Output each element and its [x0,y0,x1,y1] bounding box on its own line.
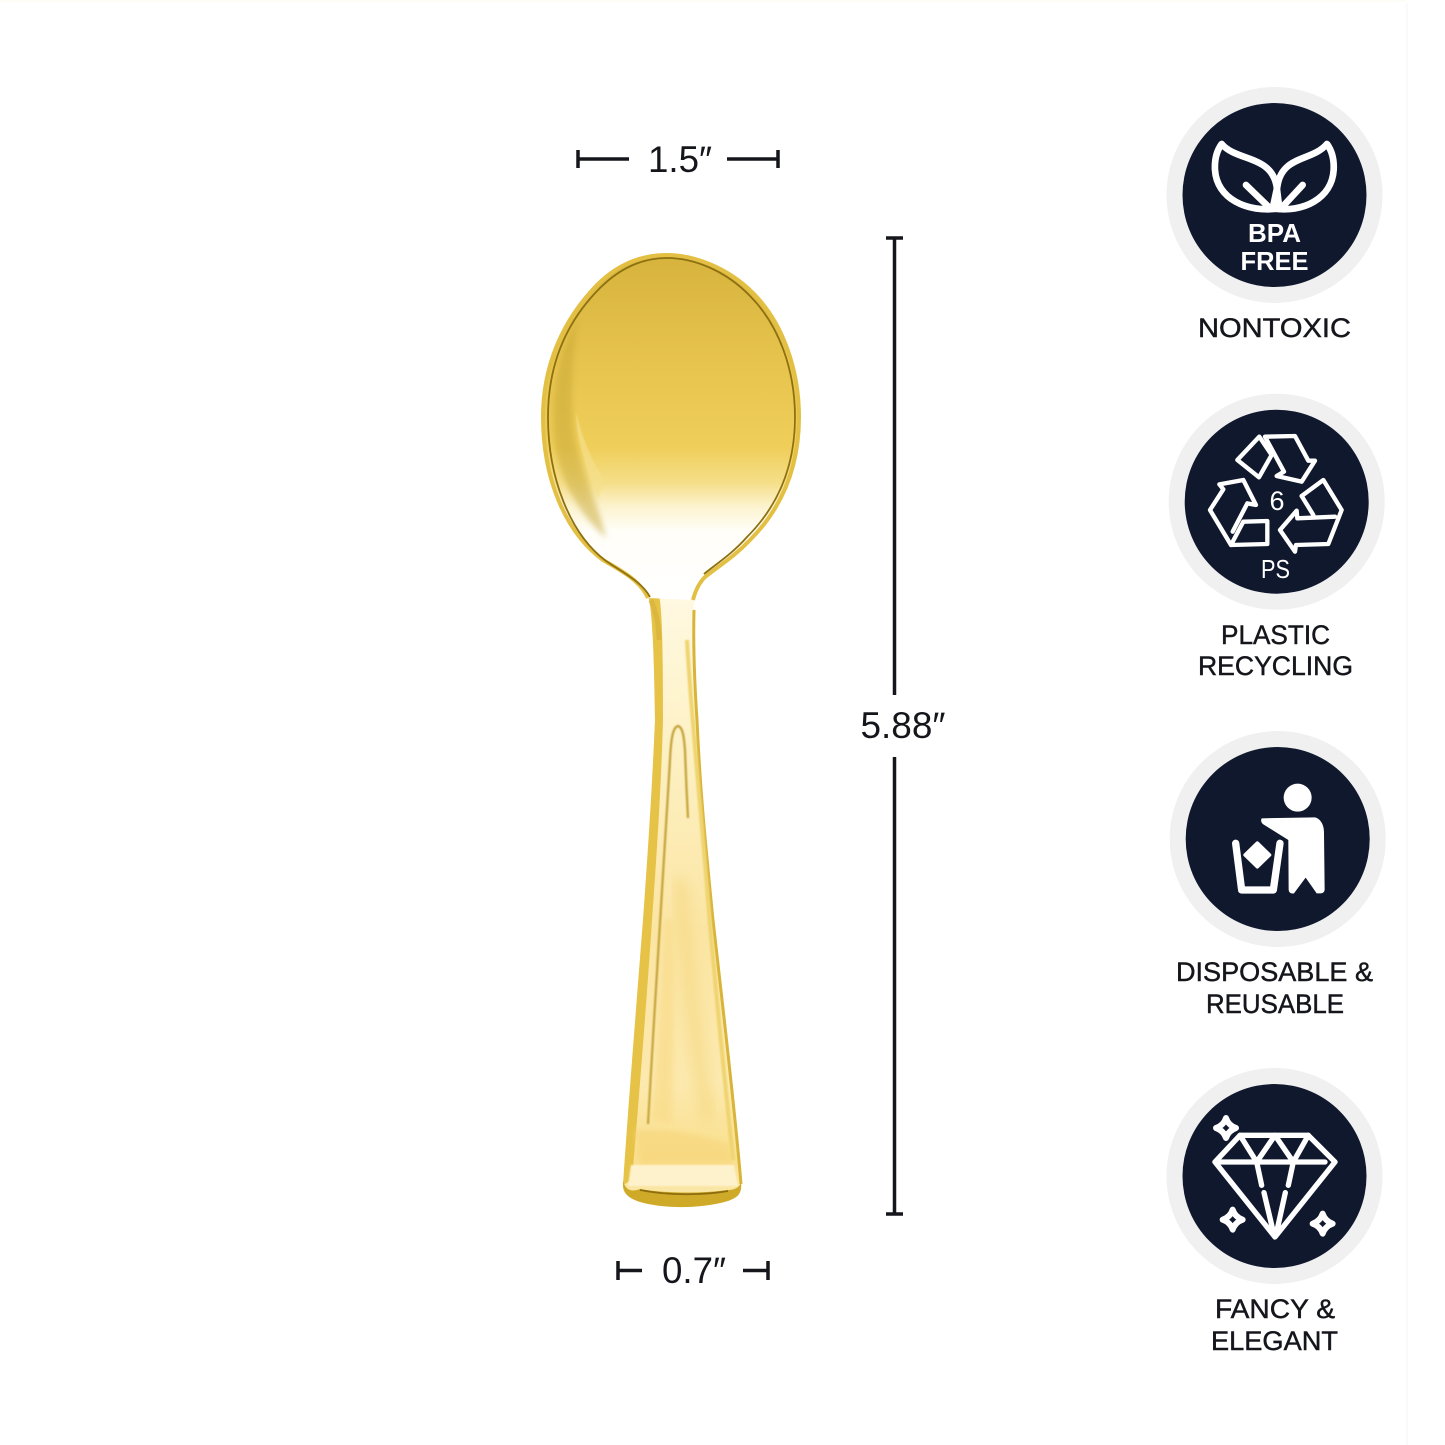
feature: nontoxic: NONTOXIC [1198,313,1351,343]
feature: fancy and elegant [1166,1068,1382,1356]
product photo: gold spoon [543,255,799,1207]
feature: plastic recycling: PLASTIC [1221,620,1330,650]
feature: fancy and elegant: FANCY & [1215,1294,1335,1324]
badge: person and bin [1170,731,1386,947]
icon: recycling arrows [1210,436,1342,552]
dimension: total length 5.88 inches: 5.88″ [860,705,946,746]
badge: recycling 6 PS: PS [1261,554,1290,584]
spoon handle [623,596,741,1207]
badge: BPA free: BPA [1248,218,1301,248]
dimension: total length 5.88 inches [860,238,946,1214]
dimension: handle width 0.7 inches: 0.7″ [662,1250,726,1291]
badge: diamond [1166,1068,1382,1284]
dimension: bowl width 1.5 inches [578,139,778,180]
handle groove [648,726,688,1124]
spoon bowl [543,255,799,640]
icon: person throwing trash in bin [1236,784,1325,894]
feature: plastic recycling [1169,394,1385,681]
dimension: bowl width 1.5 inches: 1.5″ [648,139,712,180]
feature: disposable and reusable: REUSABLE [1206,989,1344,1019]
badge: BPA free [1166,87,1382,303]
handle tip [635,1130,733,1165]
badge: recycling 6 PS [1169,394,1385,610]
feature: fancy and elegant: ELEGANT [1211,1326,1338,1356]
feature: plastic recycling: RECYCLING [1198,651,1353,681]
feature: disposable and reusable: DISPOSABLE & [1176,957,1373,987]
icon: leaves [1215,144,1334,209]
dimension: handle width 0.7 inches [618,1250,768,1291]
icon: diamond with sparkles [1215,1118,1335,1237]
feature: nontoxic [1166,87,1382,343]
feature: disposable and reusable [1170,731,1386,1019]
badge: recycling 6 PS: 6 [1269,486,1285,516]
badge: BPA free: FREE [1240,246,1308,276]
